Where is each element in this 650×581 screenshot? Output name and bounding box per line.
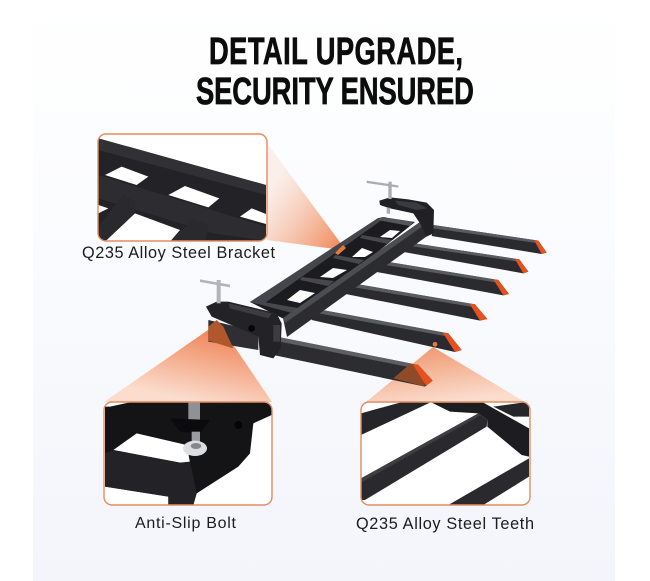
frame body: [105, 402, 272, 505]
tine stubs: [106, 239, 108, 240]
center tine: [361, 413, 487, 500]
detail panel: teeth: [361, 402, 530, 505]
upper tine: [361, 402, 430, 435]
detail panel: bracket: [98, 134, 267, 242]
detail panel: bolt: [104, 402, 272, 505]
tine 6: [273, 337, 433, 387]
label: bracket: Q235 Alloy Steel Bracket: [82, 244, 275, 262]
front beam: [283, 222, 430, 337]
title: SECURITY ENSURED: [196, 71, 474, 113]
label: bolt: Anti-Slip Bolt: [135, 515, 237, 532]
cross beam: [432, 403, 529, 457]
frame underside: [250, 217, 415, 322]
tine 5: [312, 308, 462, 352]
tine 3: [375, 260, 509, 295]
callout cone: teeth: [366, 347, 525, 402]
lower tine: [448, 458, 529, 505]
panel border: teeth: [361, 402, 530, 505]
tine 1: [432, 225, 547, 254]
tine 4: [346, 283, 487, 321]
panel border: bolt: [104, 402, 272, 505]
gaps below frame: [98, 205, 108, 213]
rear rail: [250, 217, 386, 305]
bracket highlight: [335, 245, 346, 255]
callout cone: bolt: [104, 330, 272, 402]
front clamp: [200, 279, 282, 358]
tines: [273, 225, 547, 387]
title: DETAIL UPGRADE,: [209, 31, 463, 73]
product: clay fork attachment: [200, 181, 547, 387]
window: [113, 433, 190, 463]
clamp hole: [234, 421, 242, 429]
front beam: [105, 450, 197, 505]
panel border: bracket: [98, 134, 267, 241]
frame rails: [98, 138, 266, 241]
frame: [250, 217, 430, 337]
tine 2: [402, 242, 528, 273]
label: teeth: Q235 Alloy Steel Teeth: [356, 515, 534, 533]
bolt: [188, 402, 200, 420]
title: [196, 31, 474, 113]
frame windows: [287, 290, 315, 303]
rear clamp: [367, 181, 434, 237]
callout cone: bracket: [267, 143, 342, 249]
frame windows: [105, 167, 148, 185]
rungs: [378, 217, 413, 226]
